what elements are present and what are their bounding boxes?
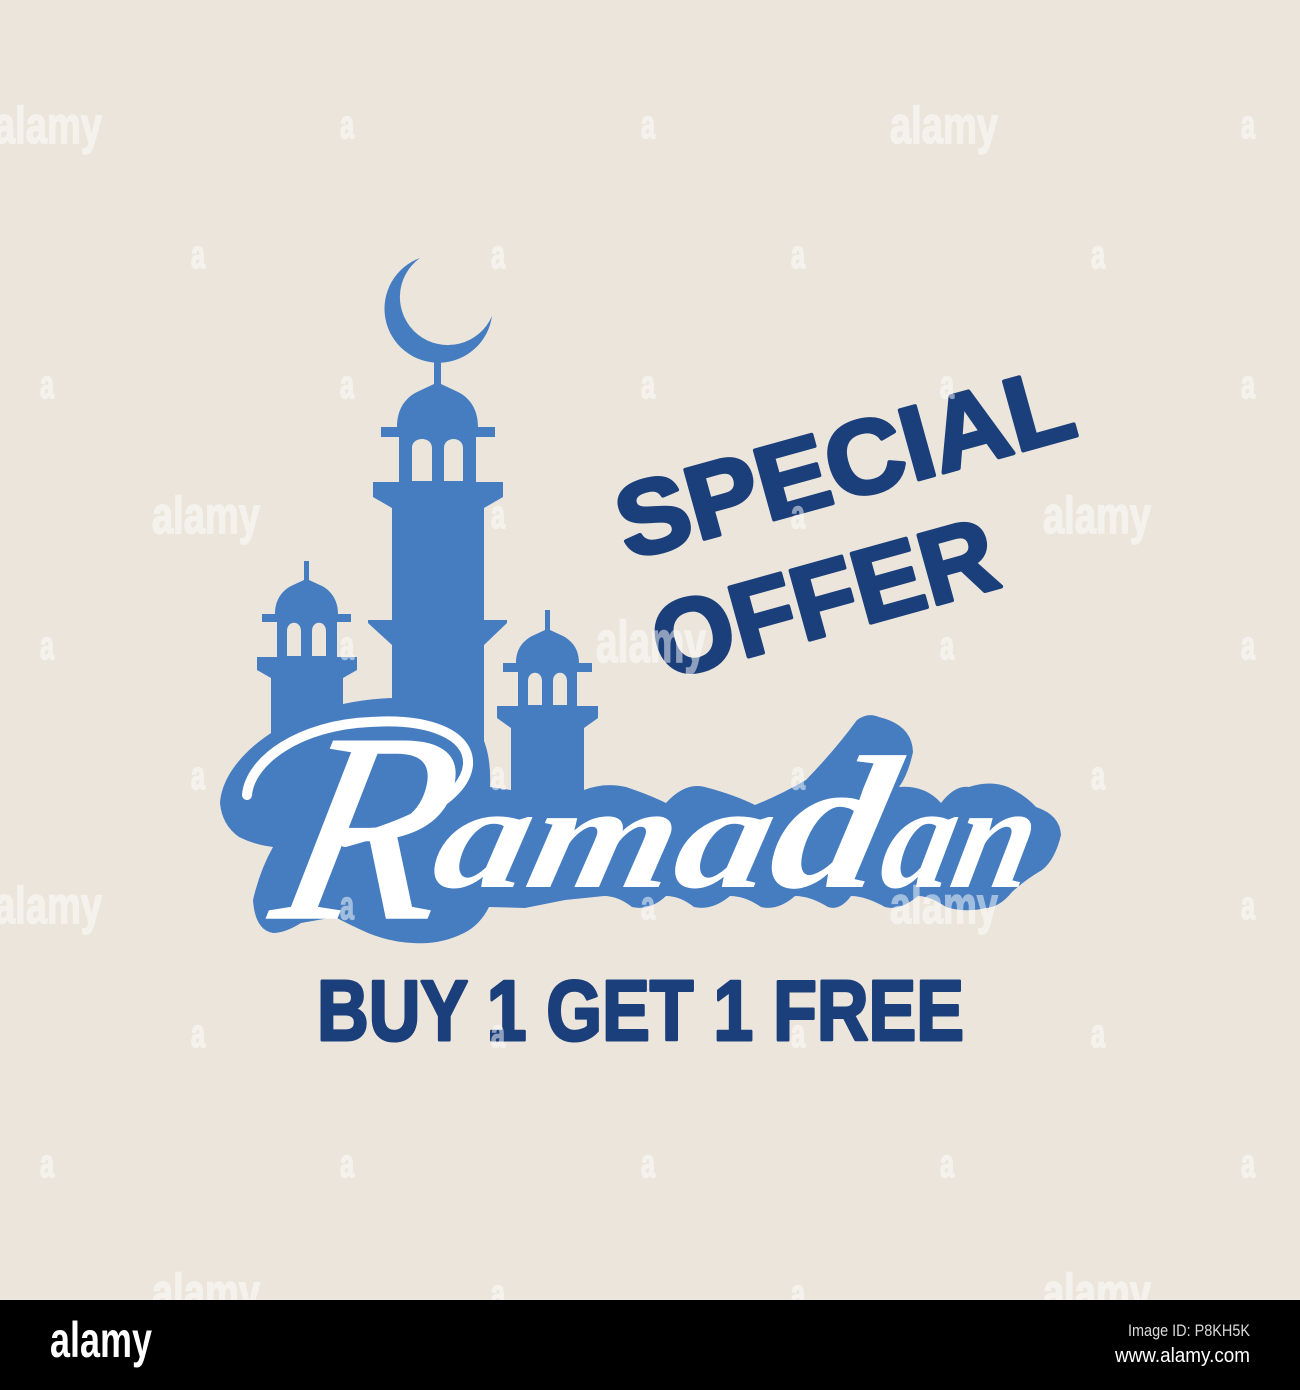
watermark pattern: a [940,363,954,407]
watermark pattern: a [491,1012,505,1056]
watermark pattern: alamy [596,610,706,675]
watermark pattern: a [1241,1142,1255,1186]
watermark pattern: a [191,233,205,277]
watermark pattern: alamy [1043,487,1151,545]
watermark pattern: alamy [890,877,998,935]
heading: OFFER: OFFER [639,496,1009,702]
icon: left minaret [257,561,357,800]
lowercase letters: an [869,753,1054,920]
lowercase letters: d [755,718,915,929]
capital R: R [251,679,484,977]
watermark pattern: a [491,233,505,277]
watermark pattern: alamy [152,487,260,545]
watermark pattern: a [1241,103,1255,147]
decorative swash of the capital [247,721,468,842]
watermark pattern: a [791,233,805,277]
watermark pattern: a [791,754,805,798]
title: Ramadan script lettering [247,679,1062,977]
watermark pattern: a [340,884,354,928]
watermark pattern: a [791,1272,805,1316]
watermark pattern: a [641,103,655,147]
watermark pattern: a [1091,1012,1105,1056]
watermark pattern: a [1091,754,1105,798]
image id: Image ID: P8KH5K [1128,1321,1251,1340]
watermark pattern: a [940,1142,954,1186]
ramadan badge background [220,698,1061,943]
watermark pattern: a [1241,624,1255,668]
watermark pattern: alamy [890,97,998,155]
watermark pattern: a [940,624,954,668]
watermark pattern: a [340,1142,354,1186]
watermark pattern: a [1241,884,1255,928]
watermark pattern: a [340,624,354,668]
watermark pattern: a [40,363,54,407]
website url: www.alamy.com [1114,1345,1250,1367]
watermark pattern: a [641,1142,655,1186]
watermark pattern: a [491,493,505,537]
watermark pattern: a [40,624,54,668]
subheading: buy 1 get 1 free: BUY 1 GET 1 FREE [317,964,964,1059]
watermark pattern: a [641,363,655,407]
watermark pattern: a [1091,233,1105,277]
heading: SPECIAL: SPECIAL [603,345,1086,582]
footer bar [0,1300,1300,1390]
watermark pattern: a [1241,363,1255,407]
watermark pattern: a [791,493,805,537]
watermark pattern: a [791,1012,805,1056]
icon: central minaret [368,362,507,800]
footer logo: alamy [50,1312,152,1368]
watermark pattern: a [491,754,505,798]
watermark pattern: a [491,1272,505,1316]
watermark pattern: a [191,754,205,798]
watermark pattern: a [40,1142,54,1186]
watermark pattern: a [340,103,354,147]
lowercase letters: ama [421,753,791,920]
watermark pattern: a [641,884,655,928]
watermark pattern: alamy [152,1264,260,1322]
watermark pattern: a [191,1012,205,1056]
icon: right minaret [497,610,598,800]
watermark pattern: alamy [1043,1264,1151,1322]
icon: crescent moon [384,258,492,363]
watermark pattern: a [340,363,354,407]
